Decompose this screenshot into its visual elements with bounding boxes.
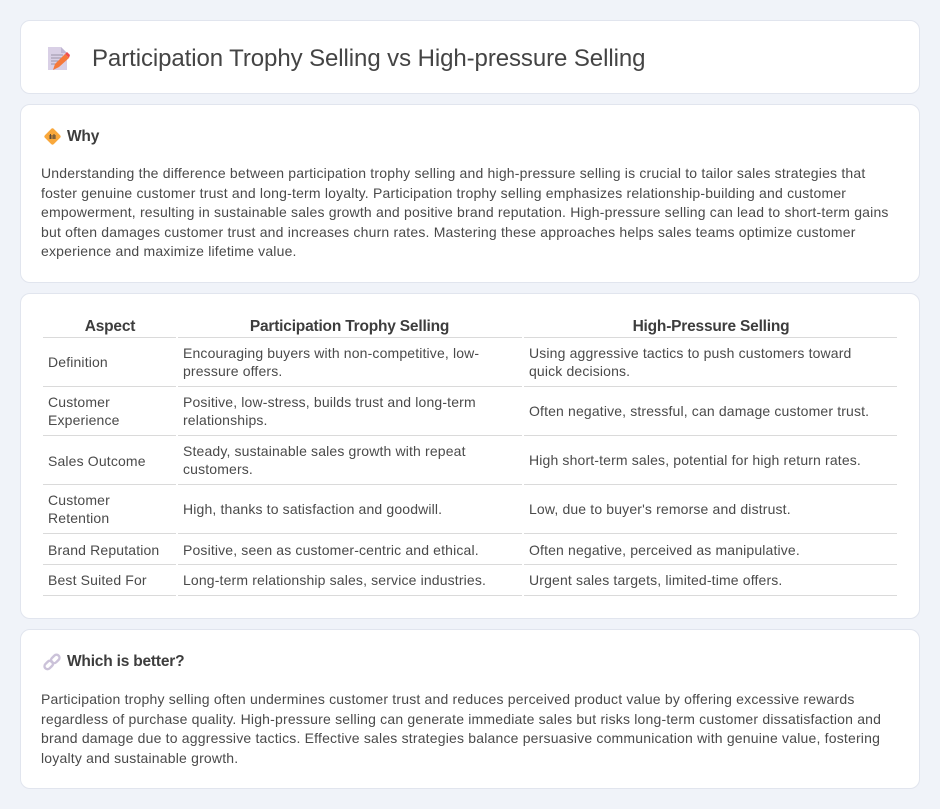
panel: which is better	[20, 629, 920, 789]
row: best suited for: Long-term relationship sales, service industries.	[183, 572, 486, 588]
row: best suited for: Urgent sales targets, limited-time offers.	[529, 572, 782, 588]
row: customer experience	[48, 394, 869, 428]
row: best suited for	[48, 572, 782, 588]
row: definition: Definition	[48, 354, 108, 370]
table header row: Participation Trophy Selling	[250, 318, 449, 335]
row: definition: pressure offers.	[183, 363, 282, 379]
row: sales outcome: Steady, sustainable sales growth with repeat	[183, 443, 466, 459]
table header row	[85, 318, 789, 335]
row: sales outcome	[48, 443, 861, 477]
text block: why explanation: experience and maximize lifetime value.	[41, 243, 297, 259]
row: customer retention	[48, 492, 791, 526]
panel: title header	[20, 20, 920, 94]
row: definition: Encouraging buyers with non-competitive, low-	[183, 345, 479, 361]
heading: why: Why	[67, 128, 99, 145]
row: customer experience: Positive, low-stress, builds trust and long-term	[183, 394, 476, 410]
text block: why explanation: empowerment, resulting in sustainable sales growth and positive brand reputation. High-pressure selling can lead to short-term gains	[41, 204, 889, 220]
icon: warning diamond	[44, 128, 61, 145]
row: brand reputation: Often negative, perceived as manipulative.	[529, 542, 800, 558]
title: Participation Trophy Selling vs High-pressure Selling	[92, 45, 645, 72]
row: definition	[48, 345, 852, 379]
panel: why	[20, 104, 920, 283]
text block: why explanation	[41, 165, 889, 259]
text block: verdict	[41, 691, 881, 766]
comparison table	[43, 318, 897, 596]
text block: why explanation: foster genuine customer trust and long-term loyalty. Participation trophy selling emphasizes relationship-building and customer	[41, 184, 846, 200]
row: customer experience: relationships.	[183, 412, 268, 428]
text block: verdict: loyalty and sustainable growth.	[41, 750, 238, 766]
row: customer experience: Often negative, stressful, can damage customer trust.	[529, 403, 869, 419]
row: customer retention: Customer	[48, 492, 110, 508]
table header row: High-Pressure Selling	[633, 318, 789, 335]
heading: which is better: Which is better?	[67, 653, 184, 670]
text block: verdict: brand damage due to aggressive tactics. Effective sales strategies balance persuasive communication with genuine value, fostering	[41, 730, 880, 746]
text block: why explanation: Understanding the difference between participation trophy selling and high-pressure selling is crucial to tailor sales strategies that	[41, 165, 865, 181]
row: sales outcome: Sales Outcome	[48, 453, 146, 469]
row: best suited for: Best Suited For	[48, 572, 147, 588]
row: definition: Using aggressive tactics to push customers toward	[529, 345, 852, 361]
row: customer retention: High, thanks to satisfaction and goodwill.	[183, 501, 442, 517]
row: sales outcome: customers.	[183, 461, 253, 477]
row: customer experience: Experience	[48, 412, 120, 428]
icon: link	[43, 654, 61, 670]
row: customer retention: Retention	[48, 510, 109, 526]
row: customer experience: Customer	[48, 394, 110, 410]
icon: document with pencil	[48, 47, 70, 70]
text block: why explanation: but often damages customer trust and increases churn rates. Mastering these approaches helps sales teams optimize customer	[41, 224, 856, 240]
text block: verdict: regardless of purchase quality. High-pressure selling can generate immediate sales but risks long-term customer dissatisfaction and	[41, 710, 881, 726]
row: customer retention: Low, due to buyer's remorse and distrust.	[529, 501, 791, 517]
panel: comparison table	[20, 293, 920, 619]
row: definition: quick decisions.	[529, 363, 630, 379]
text block: verdict: Participation trophy selling often undermines customer trust and reduces perceived product value by offering excessive rewards	[41, 691, 855, 707]
table header row: Aspect	[85, 318, 135, 335]
row: brand reputation	[48, 542, 800, 558]
row: brand reputation: Brand Reputation	[48, 542, 159, 558]
row: brand reputation: Positive, seen as customer-centric and ethical.	[183, 542, 479, 558]
row: sales outcome: High short-term sales, potential for high return rates.	[529, 452, 861, 468]
